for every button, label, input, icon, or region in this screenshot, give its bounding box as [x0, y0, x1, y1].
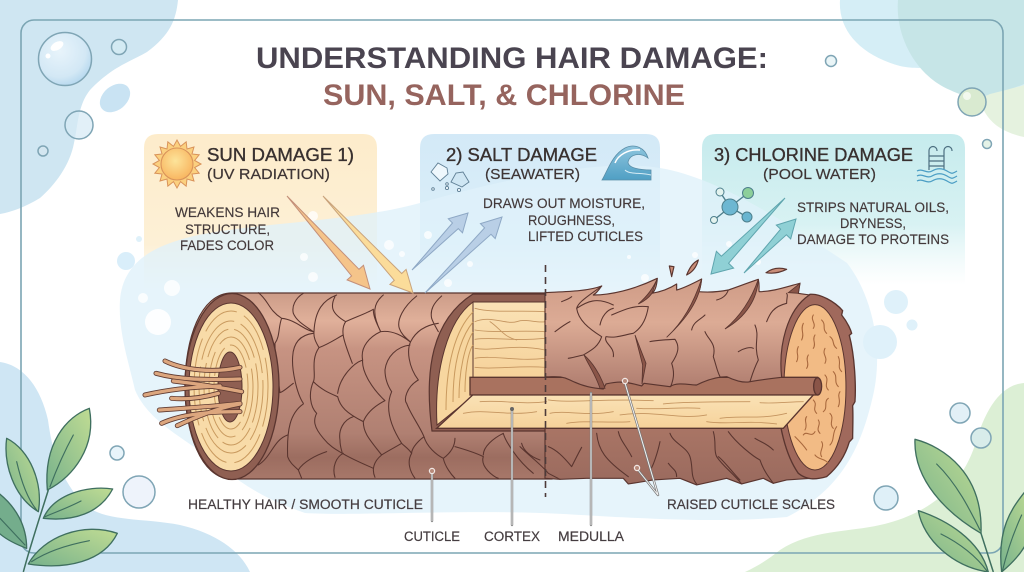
healthy cuticle scale lines: [258, 293, 540, 478]
panel: sun damage background: [144, 134, 377, 292]
panel: chlorine damage text: DAMAGE TO PROTEINS: [797, 232, 949, 247]
arrow: sun ray 2: [323, 196, 413, 293]
label: medulla: MEDULLA: [558, 529, 624, 544]
lower damaged cuticle: [520, 428, 812, 485]
icon: sun: [153, 140, 201, 188]
leaves bottom right: [915, 439, 1024, 572]
panel: salt damage text: DRAWS OUT MOISTURE,: [483, 196, 645, 211]
background blob bottom left: [0, 362, 250, 572]
icon: molecule: [710, 188, 754, 224]
panel: sun damage text: WEAKENS HAIR: [175, 205, 280, 220]
panel: sun damage text: (UV RADIATION): [207, 166, 330, 183]
panel: salt damage text: ROUGHNESS,: [528, 213, 615, 228]
loose cuticle flakes: [669, 260, 787, 277]
right cap rim: [777, 294, 855, 479]
background blob top right: [840, 0, 1024, 137]
arrow: salt 1: [412, 213, 468, 270]
upper rough cuticle: [545, 278, 809, 389]
right cap damaged cortex: [784, 305, 846, 470]
leader lines: [429, 378, 658, 525]
panel: chlorine damage text: STRIPS NATURAL OILS,: [797, 200, 949, 215]
panel: salt damage text: 2) SALT DAMAGE: [446, 145, 597, 165]
background blob top left: [0, 0, 178, 214]
icon: wave: [602, 146, 651, 180]
panel: chlorine damage text: 3) CHLORINE DAMAGE: [714, 145, 913, 165]
panel: sun damage text: [175, 145, 354, 253]
label: healthy hair: HEALTHY HAIR / SMOOTH CUTICLE: [188, 497, 423, 512]
icon: pool ladder: [917, 146, 957, 183]
leaves bottom left: [0, 408, 117, 572]
label: cuticle: CUTICLE: [404, 529, 460, 544]
panel: salt damage text: (SEAWATER): [485, 166, 580, 183]
lower cortex strip: [437, 395, 813, 428]
panel: sun damage text: FADES COLOR: [180, 238, 274, 253]
icon: salt crystals: [431, 163, 469, 192]
panel: chlorine damage text: DRYNESS,: [840, 216, 906, 231]
healthy left section: [145, 293, 552, 480]
panel: chlorine damage text: [714, 145, 949, 247]
hair fibers: [145, 361, 242, 426]
arrow: salt 2: [425, 217, 502, 293]
decorative bubbles: [38, 32, 992, 510]
panel: salt damage text: [446, 145, 645, 244]
left cortex rings: [189, 303, 273, 471]
cortex cut section: [437, 302, 552, 425]
arrow: chlorine up: [744, 219, 796, 273]
label: cortex: CORTEX: [484, 529, 540, 544]
panel: chlorine damage background: [702, 134, 965, 285]
title: UNDERSTANDING HAIR DAMAGE:: [256, 42, 768, 75]
panel: sun damage text: SUN DAMAGE 1): [207, 145, 354, 165]
arrow: sun ray 1: [287, 196, 370, 289]
medulla bar: [470, 377, 818, 395]
title: SUN, SALT, & CHLORINE: [323, 79, 685, 112]
left cross-section rim: [185, 294, 279, 480]
medulla bar end: [814, 378, 822, 395]
hair strand diagram: [145, 260, 855, 485]
panel: salt damage text: LIFTED CUTICLES: [528, 229, 643, 244]
central background blob: [117, 166, 918, 520]
arrow: chlorine down: [711, 198, 785, 274]
label: raised cuticle scales: RAISED CUTICLE SCALES: [667, 497, 835, 512]
title: [256, 42, 768, 112]
panel: chlorine damage text: (POOL WATER): [763, 166, 876, 183]
divider dashed line: [544, 265, 546, 497]
panel: salt damage background: [420, 134, 660, 292]
cutaway wedge: [429, 294, 552, 431]
damaged right section: [437, 278, 855, 485]
panel: sun damage text: STRUCTURE,: [185, 222, 270, 237]
background blob bottom right: [745, 383, 1024, 572]
